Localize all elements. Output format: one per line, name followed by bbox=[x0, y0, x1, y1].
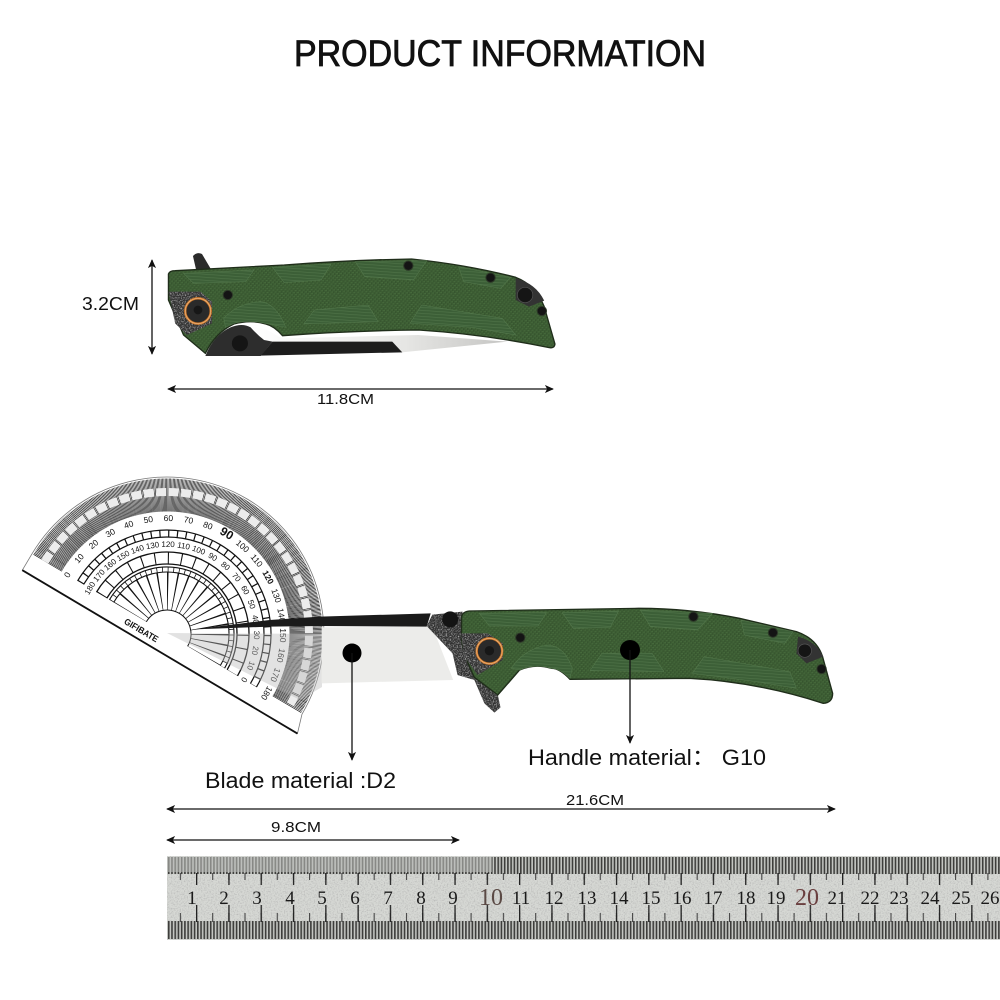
outer scale labels: 10 bbox=[72, 551, 86, 565]
inner scale labels: 60 bbox=[239, 584, 251, 597]
ruler numbers: 13 bbox=[578, 888, 596, 909]
title: PRODUCT INFORMATION bbox=[294, 33, 706, 74]
ruler numbers: 11 bbox=[512, 888, 530, 909]
steel ruler bbox=[167, 856, 1000, 940]
ruler numbers: 14 bbox=[610, 888, 629, 909]
ruler numbers: 12 bbox=[544, 888, 564, 909]
ruler numbers: 26 bbox=[980, 888, 1000, 909]
ruler bottom graduations bbox=[167, 921, 1000, 939]
inner scale labels: 20 bbox=[250, 645, 260, 656]
outer scale labels: 180 bbox=[259, 685, 275, 702]
pivot steel plate bbox=[168, 292, 212, 335]
outer scale labels: 100 bbox=[234, 538, 251, 555]
callout: handle material: Handle material： G10 bbox=[528, 745, 766, 770]
inner scale labels: 120 bbox=[161, 540, 175, 549]
inner scale labels: 30 bbox=[252, 631, 261, 640]
protractor bbox=[22, 419, 387, 734]
outer scale labels: 0 bbox=[62, 570, 73, 579]
ruler numbers: 3 bbox=[252, 888, 262, 909]
inner scale labels: 150 bbox=[115, 548, 132, 563]
handle screws bbox=[516, 612, 826, 674]
outer scale labels bbox=[59, 466, 334, 702]
inner scale labels: 40 bbox=[250, 614, 261, 625]
ruler numbers: 8 bbox=[416, 888, 426, 909]
ruler grain bbox=[167, 856, 1000, 940]
inner scale labels: 10 bbox=[245, 660, 257, 672]
ruler numbers: 2 bbox=[219, 888, 229, 909]
orange pivot ring bbox=[477, 638, 502, 664]
outer scale labels: 20 bbox=[87, 537, 101, 551]
blade length dimension: 9.8CM: 9.8CM bbox=[271, 819, 321, 836]
open knife bbox=[194, 608, 833, 713]
ruler numbers: 9 bbox=[448, 888, 458, 909]
ruler top centimetre ticks bbox=[167, 873, 1000, 885]
outer scale labels: 130 bbox=[269, 587, 284, 604]
ruler numbers: 10 bbox=[479, 885, 503, 911]
ruler top graduations bbox=[167, 857, 1000, 874]
worn top edge on the left half bbox=[167, 857, 492, 872]
outer scale labels: 80 bbox=[202, 519, 214, 532]
ruler numbers: 16 bbox=[672, 888, 692, 909]
outer scale labels: 90 bbox=[217, 524, 236, 543]
open blade body bbox=[322, 627, 453, 683]
height dimension: 3.2CM: 3.2CM bbox=[82, 294, 139, 314]
ruler numbers: 15 bbox=[642, 888, 660, 909]
inner scale labels: 90 bbox=[207, 551, 219, 563]
callout: handle material bbox=[528, 640, 766, 770]
flipper tab bbox=[193, 253, 211, 271]
ruler top half-centimetre ticks bbox=[167, 873, 1000, 880]
outer scale labels: 160 bbox=[275, 648, 287, 664]
ruler numbers: 5 bbox=[317, 888, 327, 909]
ruler numbers: 18 bbox=[736, 888, 756, 909]
closed knife bbox=[168, 253, 555, 356]
inner scale labels: 180 bbox=[83, 580, 98, 596]
inner scale labels: 70 bbox=[230, 571, 243, 584]
ruler numbers: 6 bbox=[350, 888, 360, 909]
ruler numbers: 19 bbox=[766, 888, 786, 909]
callout: blade material: Blade material :D2 bbox=[205, 768, 396, 793]
inner scale labels: 160 bbox=[102, 557, 119, 572]
handle screws bbox=[223, 261, 547, 316]
ruler numbers: 17 bbox=[704, 888, 722, 909]
stud bbox=[442, 611, 458, 627]
outer scale labels: 150 bbox=[278, 628, 288, 643]
ruler numbers: 20 bbox=[795, 885, 819, 911]
ruler numbers: 7 bbox=[383, 888, 393, 909]
inner scale labels: 110 bbox=[177, 540, 191, 552]
ruler numbers: 22 bbox=[860, 888, 880, 909]
outer white box band bbox=[45, 439, 362, 706]
rear steel insert bbox=[516, 278, 544, 307]
handle groove panels bbox=[184, 261, 516, 335]
pivot steel plate bbox=[461, 633, 503, 675]
ruler numbers: 25 bbox=[952, 888, 970, 909]
ruler numbers: 21 bbox=[828, 888, 846, 909]
inner scale labels: 170 bbox=[91, 567, 107, 584]
outer dense tick band bbox=[47, 444, 357, 705]
orange pivot ring bbox=[185, 298, 211, 324]
handle scale bbox=[462, 608, 833, 703]
ruler numbers bbox=[187, 885, 1000, 911]
width dimension: 11.8CM: 11.8CM bbox=[317, 391, 374, 408]
protractor body bbox=[22, 419, 387, 734]
blade tang bbox=[205, 325, 272, 356]
outer scale labels: 120 bbox=[260, 569, 276, 586]
blade shadow beneath protractor bbox=[167, 633, 322, 700]
outer scale labels: 30 bbox=[104, 526, 117, 540]
black blade tip bbox=[261, 342, 402, 356]
height dimension: 3.2CM bbox=[82, 260, 152, 354]
outer scale labels: 110 bbox=[249, 552, 265, 569]
ruler numbers: 1 bbox=[187, 888, 197, 909]
total length dimension: 21.6CM: 21.6CM bbox=[566, 792, 624, 809]
ruler numbers: 4 bbox=[285, 888, 295, 909]
inner scale labels bbox=[83, 505, 296, 688]
closed blade edge bbox=[251, 327, 507, 355]
inner scale labels: 0 bbox=[239, 675, 249, 684]
middle box band bbox=[78, 491, 310, 687]
outer scale labels: 170 bbox=[268, 667, 283, 684]
inner scale labels: 100 bbox=[191, 544, 207, 557]
outer scale labels: 140 bbox=[275, 607, 288, 623]
inner scale labels: 80 bbox=[219, 560, 232, 573]
ruler numbers: 23 bbox=[890, 888, 908, 909]
protractor base edge bbox=[22, 570, 297, 734]
inner scale labels: 140 bbox=[130, 543, 146, 556]
ruler bottom half-centimetre ticks bbox=[167, 913, 1000, 922]
ruler body bbox=[167, 856, 1000, 940]
rear steel insert bbox=[796, 637, 823, 663]
ruler bottom centimetre ticks bbox=[167, 905, 1000, 922]
handle groove panels bbox=[479, 610, 796, 688]
pivot bolster and flipper bbox=[427, 612, 500, 713]
handle scale bbox=[168, 259, 555, 353]
blade spine bbox=[194, 613, 431, 629]
outer scale labels: 50 bbox=[143, 514, 154, 525]
outer scale labels: 60 bbox=[164, 513, 173, 523]
inner scale labels: 50 bbox=[246, 599, 257, 611]
protractor brand mark: GIFIBATE bbox=[122, 616, 160, 644]
inner scale labels: 130 bbox=[145, 540, 160, 551]
callout: blade material bbox=[205, 644, 396, 793]
tang stud bbox=[232, 335, 248, 351]
outer scale labels: 40 bbox=[123, 518, 135, 531]
inner grid bbox=[96, 522, 279, 676]
outer scale labels: 70 bbox=[183, 514, 194, 526]
ruler numbers: 24 bbox=[920, 888, 940, 909]
